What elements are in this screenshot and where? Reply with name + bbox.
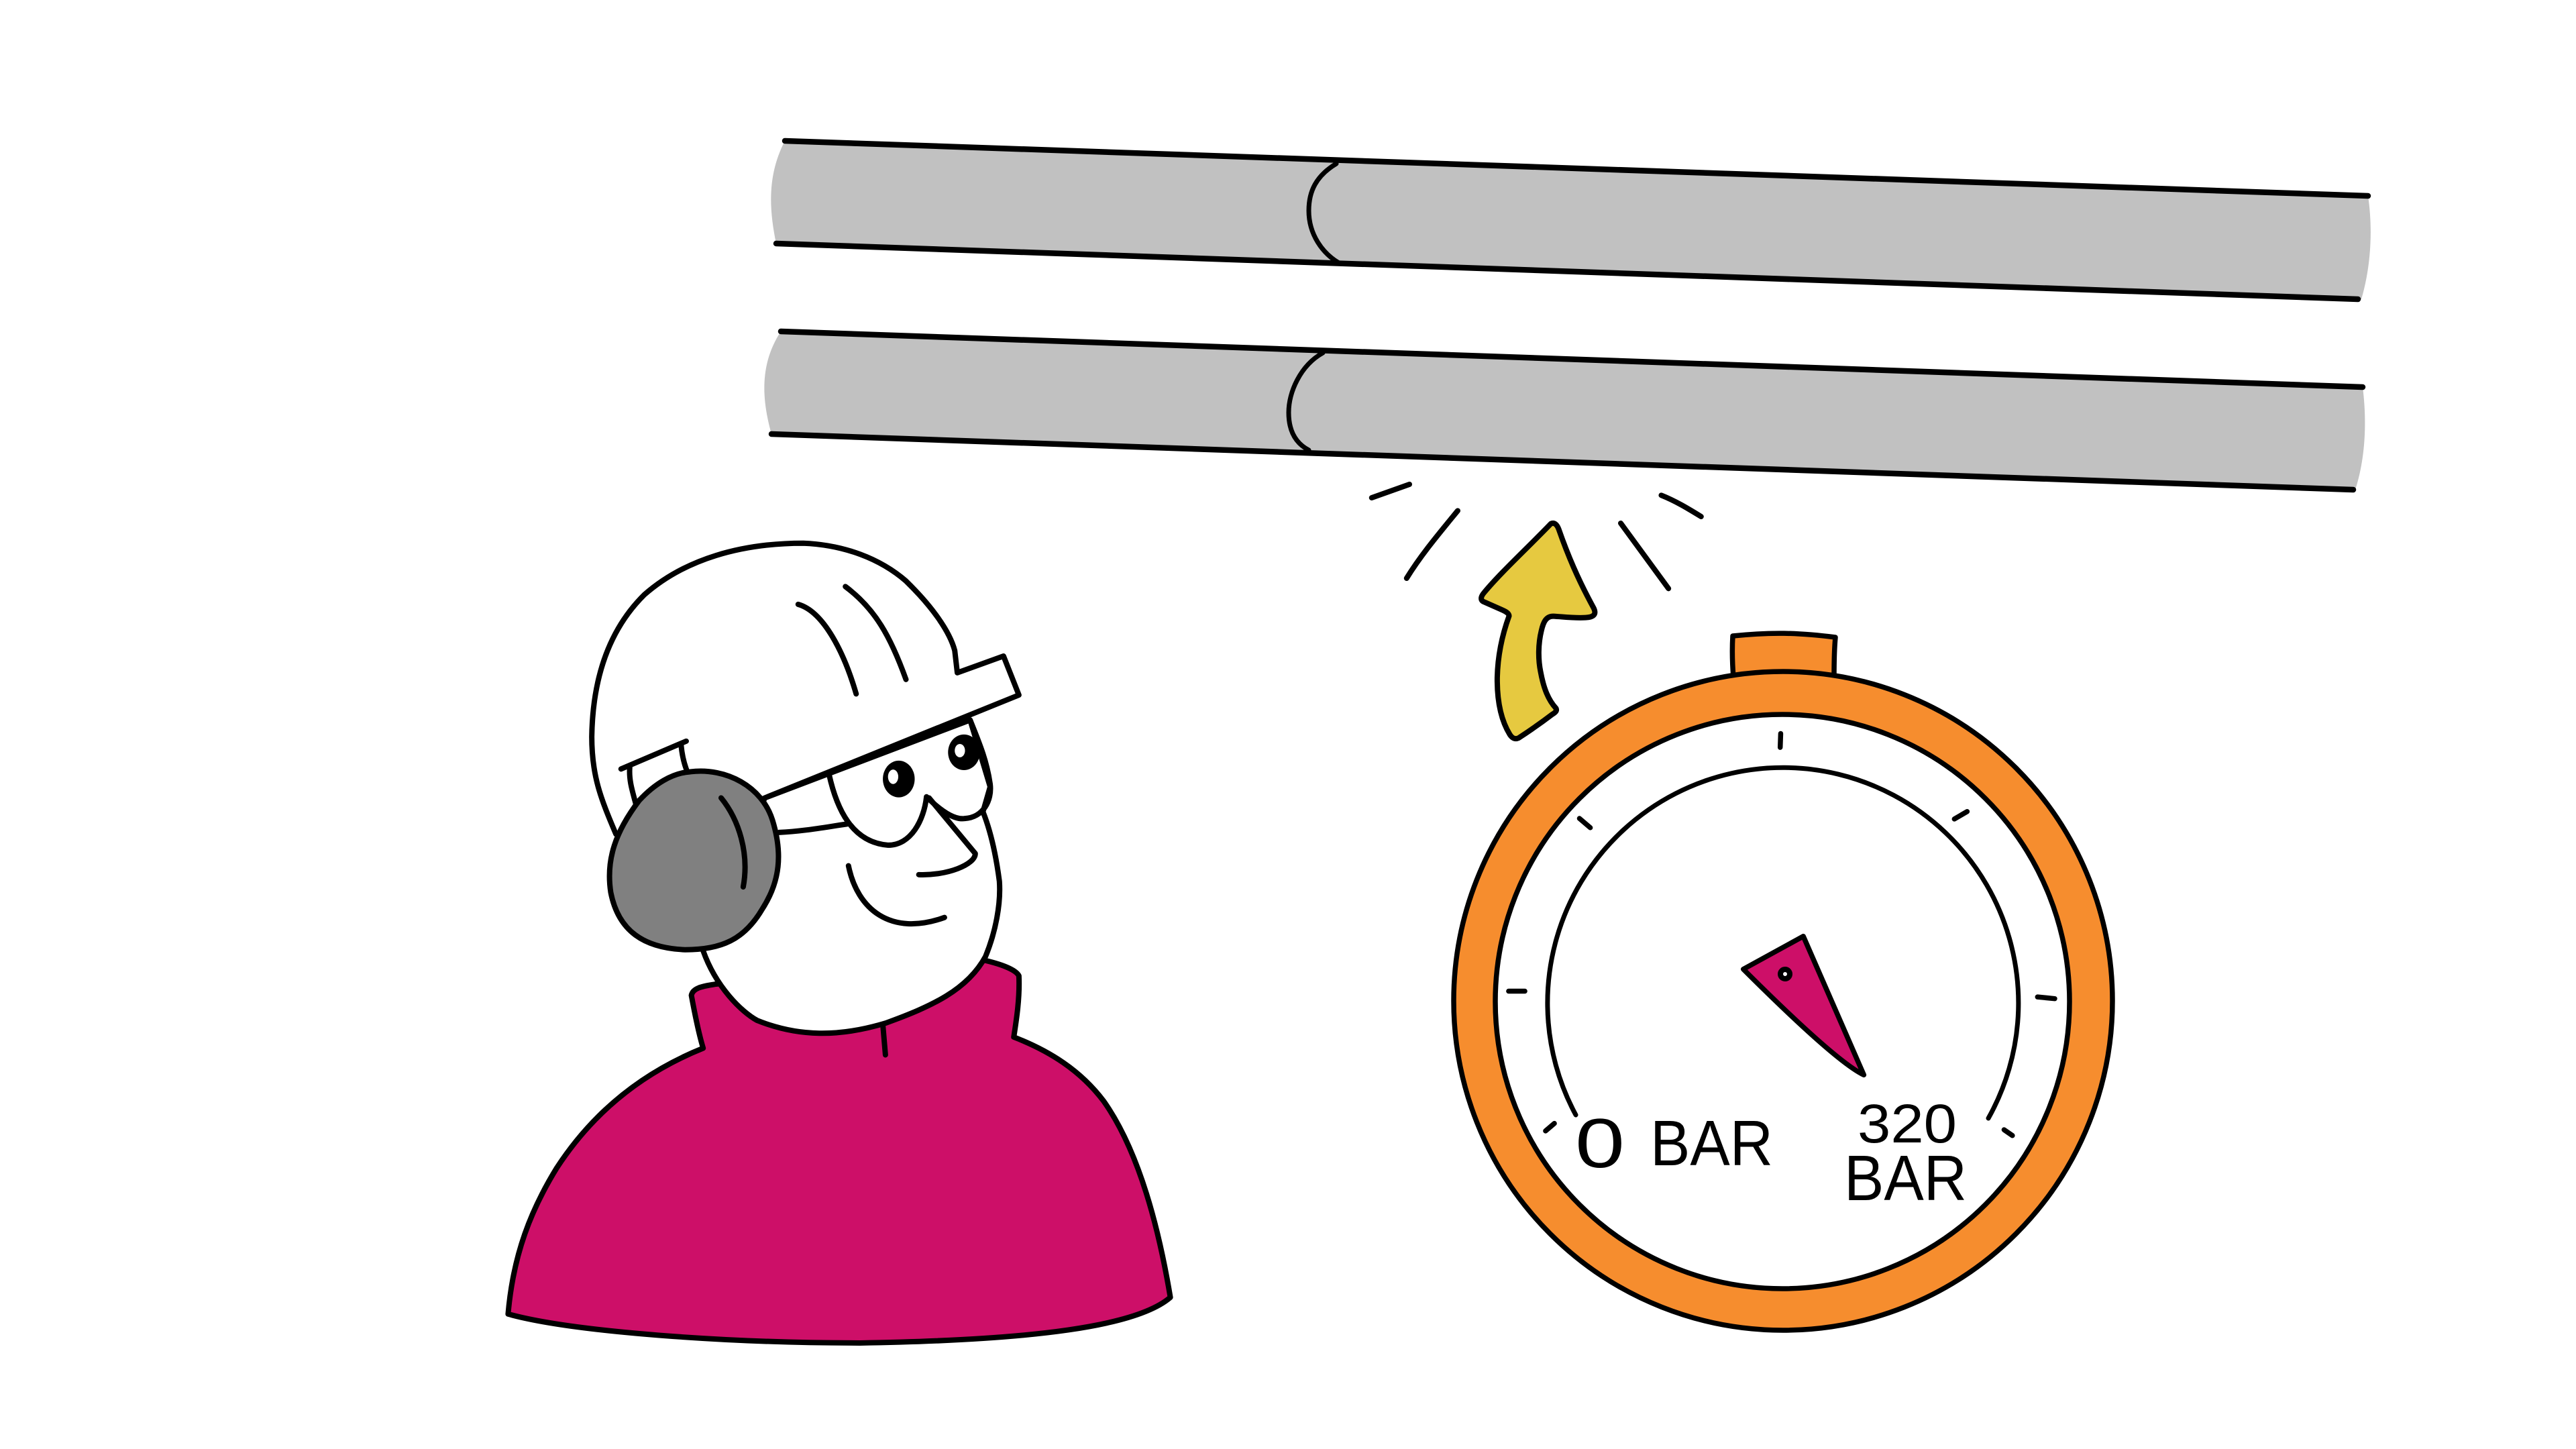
collar line <box>883 1025 885 1055</box>
pupil highlight left <box>888 769 898 784</box>
pupil highlight right <box>955 744 965 757</box>
gauge face <box>1495 714 2070 1289</box>
pressure gauge <box>1454 633 2112 1330</box>
glasses <box>779 720 990 845</box>
label: 0 bar: BAR <box>1650 1108 1773 1179</box>
eye left <box>883 761 915 798</box>
needle pivot <box>1780 969 1790 979</box>
nose <box>919 798 975 875</box>
worker with helmet and ear protection <box>508 543 1171 1343</box>
pipe: upper <box>771 141 2371 299</box>
gauge knob <box>1732 633 1835 678</box>
ear muff line <box>721 798 745 887</box>
sweater <box>508 961 1171 1343</box>
ear muff <box>610 771 778 950</box>
arrow pointing up to pipes <box>1481 523 1595 739</box>
smile <box>849 866 945 924</box>
helmet strap <box>621 741 688 806</box>
eye right <box>948 735 980 770</box>
gauge scale arc <box>1548 767 2019 1118</box>
gauge needle <box>1743 936 1864 1075</box>
gauge tick marks <box>1509 733 2055 1136</box>
gauge orange bezel <box>1454 672 2112 1330</box>
label: 0 bar <box>1575 1105 1773 1183</box>
pressure spark lines <box>1372 484 1701 588</box>
label: 320: 320 <box>1858 1093 1957 1155</box>
label: bar: BAR <box>1844 1142 1967 1214</box>
helmet lines <box>798 604 856 694</box>
face <box>703 720 1000 1033</box>
helmet <box>592 543 1019 837</box>
label: 0 bar: 0 <box>1575 1105 1625 1183</box>
pipe: lower <box>764 331 2365 490</box>
